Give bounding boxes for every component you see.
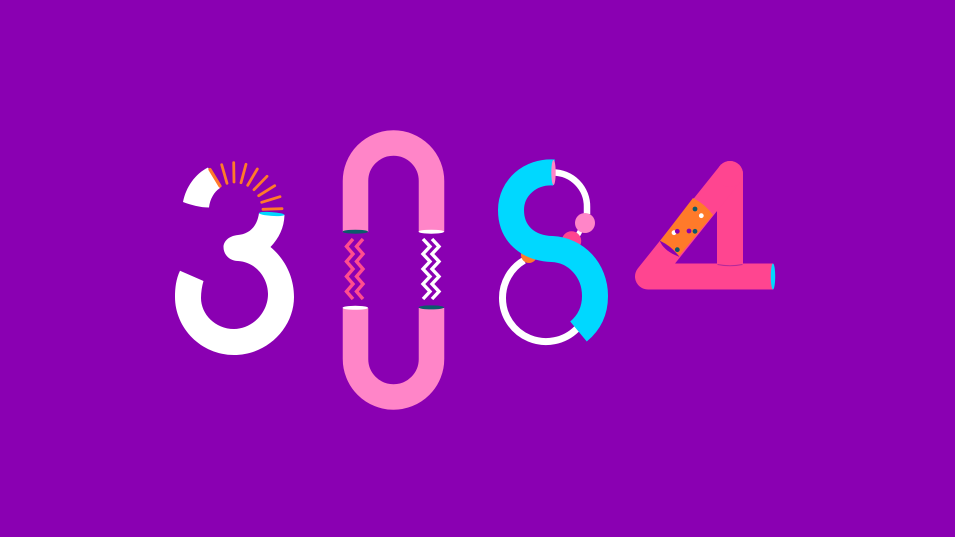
digit 8: cyan S ribbon — [511, 172, 595, 332]
digit 4 — [648, 161, 775, 290]
digit 4: purple band opening — [660, 241, 679, 256]
digit 4: dots on band — [672, 207, 704, 252]
digit 0: right white zigzags — [423, 239, 439, 299]
digit 4: vertical tube seam — [718, 264, 742, 266]
digit 0 — [343, 143, 444, 397]
digit 8: orange bead — [521, 247, 537, 263]
digit 4: vertical tube — [717, 174, 743, 265]
digit 0: left pink zigzags — [346, 239, 363, 299]
digit 0: top arch — [356, 143, 432, 232]
digit 8 — [502, 160, 595, 342]
digit 3 — [175, 163, 294, 355]
digit 8: pink tube opening — [551, 160, 556, 185]
digit 3: radiating dashes — [210, 163, 282, 209]
digit 4: orange band — [660, 198, 713, 256]
digit 3: main body — [175, 213, 294, 355]
digit 0: bottom arch — [356, 308, 432, 397]
digit 3: top arc segment — [183, 168, 220, 208]
digit 4: diagonal and base tube — [648, 174, 773, 276]
digit 3: cyan tube opening — [259, 211, 285, 217]
digit 8: pink bead — [575, 213, 595, 233]
digit 8: hot pink bead — [562, 231, 581, 251]
digit 8: thin white rings — [502, 172, 587, 342]
digit 0: tube openings — [343, 230, 444, 310]
digit 4: cyan tube opening — [771, 264, 775, 290]
digit 4: top round cap — [717, 161, 743, 187]
